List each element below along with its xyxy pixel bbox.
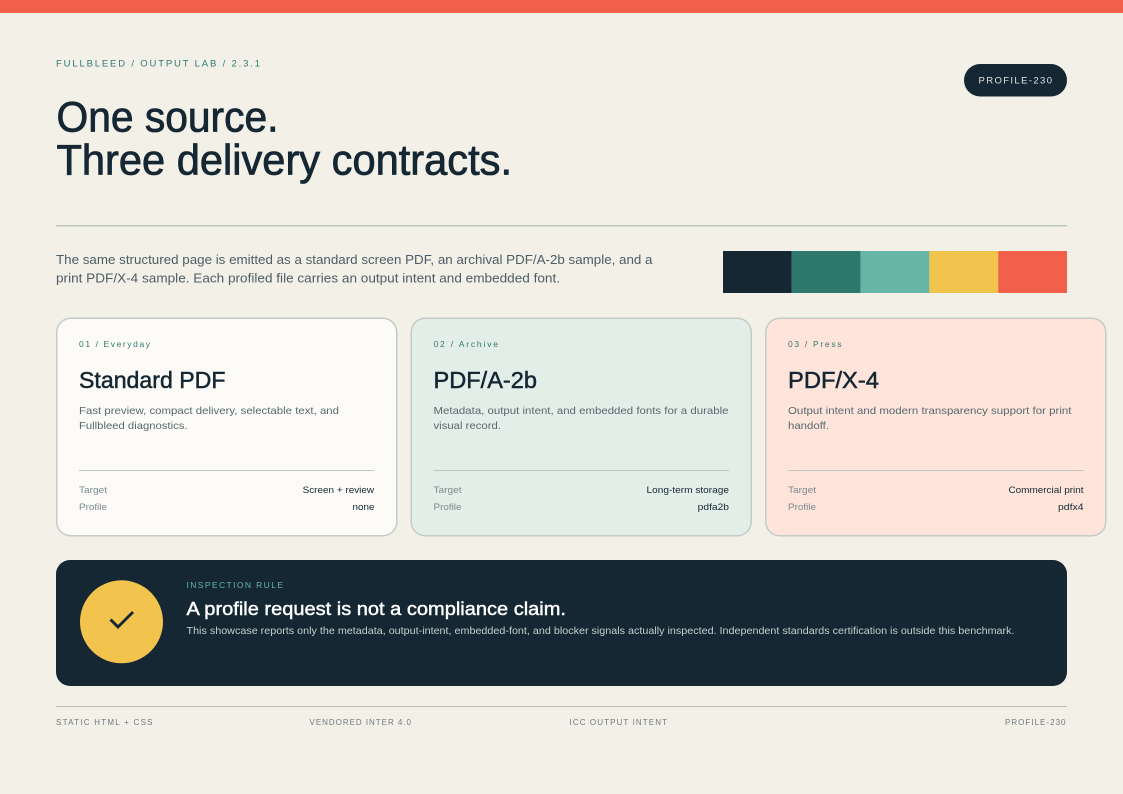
panel: inspection rule banner: [56, 560, 1067, 686]
card description: Metadata, output intent, and embedded fonts for a durable: [434, 405, 729, 417]
card heading: PDF/A-2b: [434, 367, 537, 393]
banner label: INSPECTION RULE: [186, 580, 283, 590]
card description: visual record.: [434, 420, 501, 432]
card description: [79, 405, 339, 432]
card metadata: Long-term storage: [646, 485, 729, 496]
panel: PDF/A-2b: [411, 318, 751, 536]
icon: check badge: [80, 580, 163, 663]
colour swatches: [723, 251, 1067, 293]
card metadata: pdfx4: [1058, 502, 1084, 513]
card label: 02 / Archive: [434, 339, 498, 349]
card metadata: pdfa2b: [698, 502, 729, 513]
card label: 01 / Everyday: [79, 339, 151, 349]
card description: Fullbleed diagnostics.: [79, 420, 188, 432]
title: Three delivery contracts.: [56, 136, 512, 184]
footer: ICC OUTPUT INTENT: [570, 718, 667, 727]
panel: PDF/X-4: [766, 318, 1106, 536]
card description: [434, 405, 729, 432]
card metadata: Target: [434, 485, 462, 496]
panel: Standard PDF: [57, 318, 397, 536]
card heading: PDF/X-4: [788, 367, 879, 393]
footer: VENDORED INTER 4.0: [310, 718, 412, 727]
card metadata: Commercial print: [1008, 485, 1084, 496]
title: One source.: [56, 94, 278, 142]
eyebrow: FULLBLEED / OUTPUT LAB / 2.3.1: [56, 58, 260, 70]
card metadata: Screen + review: [303, 485, 374, 496]
card metadata: Target: [788, 485, 816, 496]
card metadata: Profile: [788, 502, 816, 513]
card metadata: [79, 485, 374, 513]
card metadata: [788, 485, 1084, 513]
top accent bar: [0, 0, 1123, 13]
intro paragraph: print PDF/X-4 sample. Each profiled file carries an output intent and embedded font.: [56, 270, 560, 286]
banner heading: A profile request is not a compliance claim.: [186, 598, 566, 619]
card description: Output intent and modern transparency support for print: [788, 405, 1072, 417]
card label: 03 / Press: [788, 339, 842, 349]
card heading: Standard PDF: [79, 367, 226, 393]
card description: Fast preview, compact delivery, selectable text, and: [79, 405, 339, 417]
card metadata: Target: [79, 485, 107, 496]
intro paragraph: [56, 252, 653, 286]
profile badge: [964, 64, 1067, 96]
card description: [788, 405, 1072, 432]
footer: STATIC HTML + CSS: [56, 718, 152, 727]
title: [56, 94, 512, 184]
footer: PROFILE-230: [1005, 718, 1066, 727]
card metadata: none: [352, 502, 374, 513]
banner body: This showcase reports only the metadata, output-intent, embedded-font, and blocker signals actually inspected. Independent standards certification is outside this benchmark.: [186, 625, 1014, 637]
card description: handoff.: [788, 420, 829, 432]
card metadata: [434, 485, 729, 513]
card metadata: Profile: [79, 502, 107, 513]
intro paragraph: The same structured page is emitted as a standard screen PDF, an archival PDF/A-2b sample, and a: [56, 252, 653, 267]
footer: [56, 718, 1066, 727]
card metadata: Profile: [434, 502, 462, 513]
profile badge: PROFILE-230: [978, 76, 1052, 86]
